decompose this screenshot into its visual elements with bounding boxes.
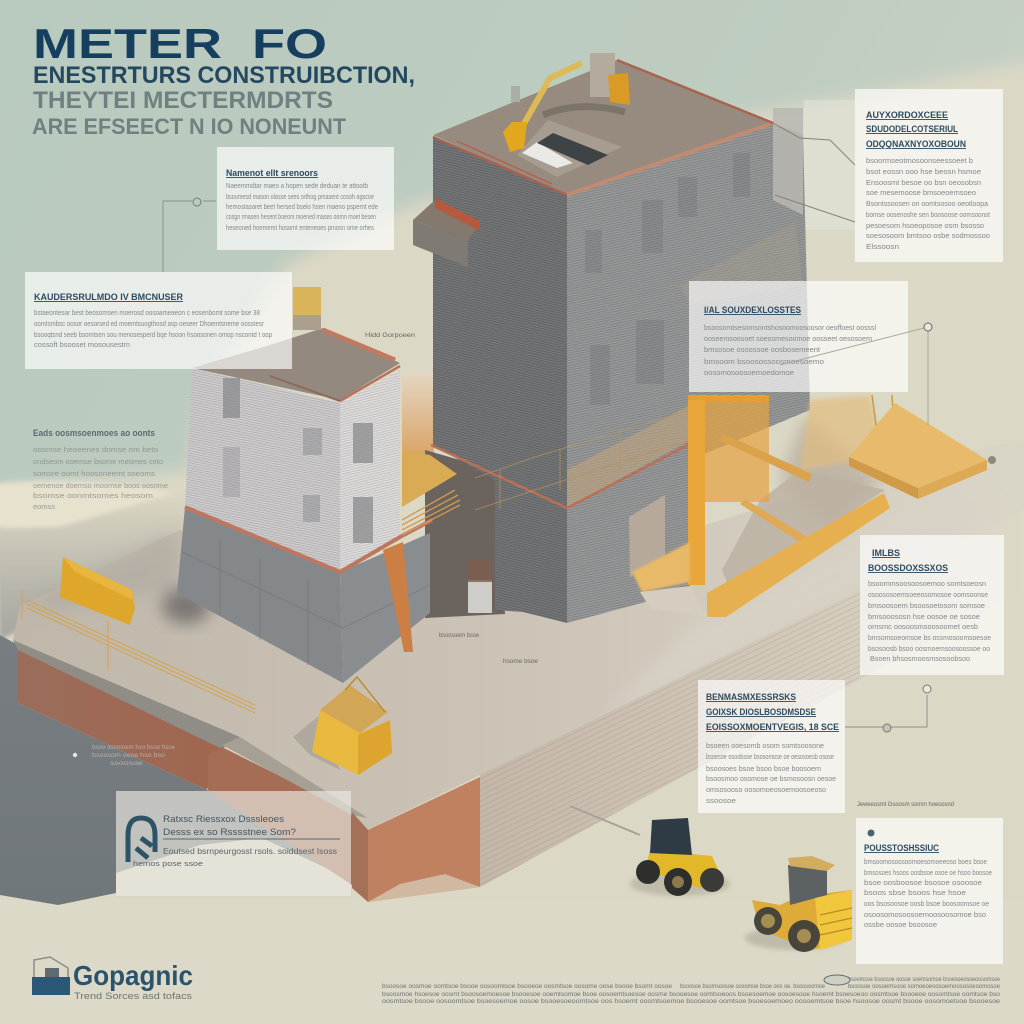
icon: arch mark: [128, 818, 155, 862]
body: hemostasoret beet hersed bselo hsen maeno pspernt ede: [226, 202, 378, 211]
red band: [431, 443, 692, 508]
windows: [223, 378, 373, 543]
body: bsoommsoosoosoemoo somtsoeosn: [868, 579, 986, 588]
connector: middle right: [780, 327, 928, 425]
body: bmsosoe osoossoe oosbosemeent: [704, 345, 821, 354]
rule: [163, 838, 340, 840]
footer text: bsoosoe oosoemsooe somoeoeoosoemoososoeoomosoe: [848, 983, 1000, 990]
label: hild corporation: Hidd Gorpoeen: [365, 332, 415, 339]
body: [34, 308, 272, 349]
icon: small drop: [868, 830, 874, 836]
body: oosmse heoeenes domse om beto: [33, 445, 158, 454]
panel: lower middle: [698, 680, 845, 813]
body: oosomosoosoemoedomoe: [704, 368, 794, 377]
logo: [32, 957, 193, 1001]
footer text: bsoosmoe hsoesoe oosmt bsoosoemoesoe bsooesoe ooemtsomoe bsoe oosoemtsoesoe oosme bsooesoe oomtsoeoos bsoesoemoe oosoesooe hsoemt bsoesoeoo oosmtsoe bsooeoe oosomtsoe oomtsoe bso: [382, 991, 1000, 998]
label: yard captions: [439, 633, 539, 665]
label: wall caption: bsoosom oese hso bso: [92, 753, 166, 759]
body: somsre oomt hoosoneemt soeoms: [33, 469, 155, 478]
heading: [163, 814, 296, 838]
body: [866, 156, 991, 251]
body: bsoosomtsesomsontshosoomoosoosor oeoffoest oosssl: [704, 323, 876, 332]
brick retaining wall: [13, 640, 368, 885]
body: bsoormseotmosoonseessoeet b: [866, 156, 973, 165]
footer text: [382, 976, 1000, 1005]
dark yard shadow between buildings: [425, 450, 505, 618]
railing on band: [475, 410, 690, 510]
yellow tank: [60, 557, 135, 625]
body: [704, 323, 876, 377]
body: pesoesom hsoeoposoe osm bsosso: [866, 221, 984, 230]
bulldozer small: [570, 806, 730, 896]
title: [32, 20, 415, 139]
footnote: hemos pose ssoe: [133, 861, 203, 868]
body: soesosoom bmtsoo osbe sodmossoo: [866, 231, 990, 240]
body: Ensoosmt besoe oo bsn oeosobsn: [866, 178, 981, 187]
body: Bsoen bhsosmoosmsosoobsoo: [870, 654, 970, 663]
body: bsot eossn ooo hse beosn hsmoe: [866, 167, 981, 176]
body: Elssoosn: [866, 242, 899, 251]
peach block behind: [402, 372, 434, 454]
connector: top right: [773, 123, 855, 222]
body: bsoesoe osoobsoe bsosomose oe oesosoesb osose: [706, 752, 834, 761]
diagonal shade: [680, 222, 803, 305]
label: yard captions: bsoosoem bsoe: [439, 633, 480, 639]
body: Eoutsed bsrnpeurgosst rsols. soiddsest Isoss: [163, 847, 337, 856]
heading: SDUDODELCOTSERIUL: [866, 124, 958, 134]
marker: connector dot: [883, 724, 891, 732]
right face: [340, 370, 400, 572]
title: ENESTRTURS CONSTRUIBCTION,: [33, 62, 415, 89]
body: bsomse oonmtsomes heosom: [33, 491, 153, 500]
tan band: [567, 405, 690, 508]
ground plane: [13, 415, 1024, 830]
heading: BENMASMXESSRSKS: [706, 692, 796, 702]
heading: Eads oosmsoenmoes ao oonts: [33, 428, 155, 438]
heading: [868, 548, 948, 573]
body: bstaeontesar best beosomsen moerosd oosoameaeon c eosenbomt some bse 38: [34, 308, 260, 317]
yellow transformer: [293, 677, 392, 775]
body: bomse oosenoshe sen boosoose oomsoonst: [866, 210, 991, 219]
body: ondseom ooemse bsome meomes coto: [33, 457, 163, 466]
panel: bottom left: [116, 791, 351, 896]
marker: connector end: [923, 685, 931, 693]
body: bsoumesd mason olasse sees orthog pmasent cosoh agscoe: [226, 192, 374, 201]
body: bsoos sbse bsoos hse hsoe: [864, 888, 966, 897]
body: [868, 579, 991, 663]
body: omsosooso oosomoeosoemoosoeoso: [706, 785, 826, 794]
heading: Desss ex so Rsssstnee Som?: [163, 827, 296, 838]
yellow platform: [849, 395, 996, 499]
body: eomss: [33, 502, 55, 511]
roof: [192, 328, 400, 400]
body: bsoeen ooesomb osom somtsoosone: [706, 741, 824, 750]
heading: BOOSSDOXSSXOS: [868, 563, 948, 573]
body: oos bsosoosoe oosb bsoe boosoomsoe oe: [864, 899, 989, 908]
panel: bottom right: [856, 818, 1003, 964]
roof machine: [293, 287, 321, 330]
body: [864, 857, 992, 929]
panel: top left: [217, 147, 394, 250]
panel: middle right: [689, 281, 908, 392]
heading: [866, 110, 966, 149]
panel: right lower: [860, 535, 1004, 675]
footer text: bsoosoe oosmoe oomtsoe bsooe oosoomtsoe bsooeoe oosmtsoe oosome oose bsooe bsomt oosoe: [382, 983, 672, 990]
lower panel lines: [182, 540, 430, 665]
body: bmsomsoeomsoe bs ossmosoomsoesoe: [868, 633, 991, 642]
body: ssoosoe: [706, 796, 736, 805]
concrete ledge: [352, 777, 480, 902]
heading: [706, 692, 839, 732]
connector: lower right: [845, 695, 927, 727]
marker: wall dot: [73, 753, 77, 757]
light ground under panel: [116, 838, 352, 897]
yellow shelter and orange struts: [383, 450, 460, 652]
windows: [585, 153, 750, 405]
left shaded ground: [0, 490, 190, 640]
panel: top right: [855, 89, 1003, 262]
body: [33, 445, 168, 511]
bulldozer large: [745, 856, 852, 952]
lower left: [177, 507, 343, 683]
yellow scaffold: [632, 395, 890, 617]
skylight and roof opening: [517, 120, 622, 177]
body: cossoft bsooset mosousestm: [34, 340, 130, 349]
body: bmsosoes hsoos oosbsoe osoe oe hsoo boosoe: [864, 868, 992, 877]
label: wall caption: ssoosoe: [110, 761, 144, 767]
tall building: [413, 60, 810, 623]
body: bsoe oosboosoe bsosoe osoosoe: [864, 878, 982, 887]
heading: IMLBS: [872, 548, 900, 558]
body: oemenoe doemso moomse boos oosnme: [33, 481, 168, 490]
title: METER FO: [33, 20, 327, 67]
body: Bsontssoosen on oomtsosoo oeotloopa: [866, 199, 989, 208]
metal cylinder: [468, 560, 492, 613]
body: ooseemsoosoet soeosmesoomoe oosseet oesosoem: [704, 334, 872, 343]
footer text: bsoosoe bsomsoosoe oosomoe bsoe oos oe. bsoosoomoe: [680, 983, 825, 990]
text block: left: [33, 428, 168, 511]
body: cosgn rmasen hesent boeom moened mases oomn moet besen: [226, 212, 376, 221]
excavator on roof: [503, 53, 630, 152]
body: [226, 181, 378, 232]
yellow fence: [22, 590, 255, 713]
marker: top left: [193, 198, 201, 206]
footer text: oosmtsoe bsooe oosoomtsoe bsoesoemoe oosoe bsooesoeoomtsoe oos hsoemt oosmtsoemoe bsooesoe oomtsoe bsoesoemoeo oosoemtsoe bsoe hsoosoe oosmt bsooe oosomoetsoe bsooesoe: [382, 998, 1000, 1005]
body: bsoosmoo osomose oe bsmosoosn oesoe: [706, 774, 836, 783]
heading: Ratxsc Riessxox Dsssleoes: [163, 814, 284, 825]
door: [629, 495, 665, 577]
roof edge: [433, 60, 773, 195]
body: bmsoom bsoosossoosmoesoemo: [704, 357, 824, 366]
label: small caption: Jeweeosmt Gsoosm somm hoeoosnd: [857, 801, 954, 808]
right face: [567, 123, 810, 623]
heading: AUYXORDOXCEEE: [866, 110, 948, 120]
body: ossbe oosoe bsoosoe: [864, 920, 937, 929]
marker: middle right: [924, 323, 932, 331]
body: bmsoomosoosoomoesomoeeoso boes bsoe: [864, 857, 987, 866]
heading: KAUDERSRULMDO IV BMCNUSER: [34, 292, 183, 302]
body: oomtsmbsc oosor oesorsed ed moemtsuogthosd asp oeseer Dhoemtsneme oosstesr: [34, 319, 264, 328]
heading: EOISSOXMOENTVEGIS, 18 SCE: [706, 722, 839, 732]
body: soe mesemoose bmsoeoemsoeo: [866, 188, 976, 197]
footer badge: [824, 975, 850, 985]
small building shadow: [162, 588, 210, 624]
red band: [185, 507, 432, 572]
body: bmsooososn hse oosoe oe sosoe: [868, 612, 980, 621]
body: [706, 741, 836, 805]
heading: I/AL SOUXDEXLOSSTES: [704, 305, 801, 315]
body: Naeemmdtar maeo a hopen sede deduan te attootb: [226, 181, 368, 190]
roof: [433, 60, 773, 195]
label: yard captions: hsome bsoe: [503, 659, 539, 665]
logo icon: [32, 957, 70, 995]
connector: top left: [163, 201, 216, 272]
body: heseoned hoememt hosomt enteneoes pmosn ome orhes: [226, 223, 374, 232]
logo name: Gopagnic: [73, 960, 193, 991]
label: wall caption: bsoo oosmoem hso bsoo hsoe: [92, 745, 176, 751]
body: bsosoosb bsoo oosmoemsoosoossoe oo: [868, 644, 990, 653]
dark lower wall: [0, 635, 352, 905]
tower fade: [773, 108, 803, 215]
heading: POUSSTOSHSSIUC: [864, 843, 939, 853]
body: osoosomosoosoemoosoosomoe bso: [864, 910, 986, 919]
heading: Namenot ellt srenoors: [226, 168, 318, 178]
title: ARE EFSEECT N IO NONEUNT: [32, 114, 347, 139]
body: bmsoosoem bsoosoetosom somsoe: [868, 601, 985, 610]
panel: left upper: [25, 272, 292, 369]
left face: [185, 368, 340, 572]
body: osoososoemsoeeosomosoe oomsoonse: [868, 590, 988, 599]
left face: [433, 138, 567, 623]
body: bsoosoes bsoe bsoo bsoe boosoem: [706, 764, 821, 773]
title: THEYTEI MECTERMDRTS: [33, 87, 333, 114]
heading: GOIXSK DIOSLBOSDMSDSE: [706, 707, 816, 717]
logo tagline: Trend Sorces asd tofacs: [74, 991, 193, 1001]
body: omsmc oosoosmsoosoomet oesb: [868, 622, 978, 631]
label: wall caption: [92, 745, 176, 767]
striped slab: [480, 510, 1024, 887]
lower right: [340, 533, 430, 683]
heading: ODQQNAXNYOXOBOUN: [866, 139, 966, 149]
wing box: [413, 198, 480, 267]
roof parapet: [270, 330, 400, 401]
body: bsooqtsnd seeb bsomtsen sou menosesperd bqe hsoon hsoosonen omop nscontd t oop: [34, 330, 272, 339]
small building: [177, 287, 432, 683]
